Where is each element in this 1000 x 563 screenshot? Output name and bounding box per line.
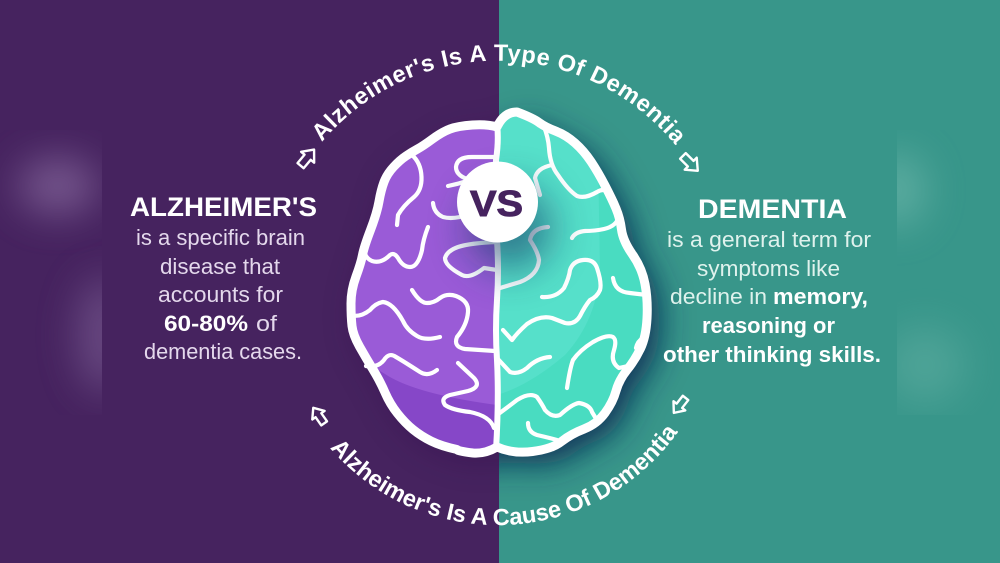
left hemisphere folds [350,155,497,428]
midline [496,124,498,450]
icon: arrow bottom right [668,393,691,417]
text block: Dementia [663,194,881,367]
brain illustration [346,108,652,458]
heading: Alzheimer's: ALZHEIMER'S [130,192,317,222]
description: Dementia [663,227,881,367]
description: Alzheimer's: of [256,311,278,336]
heading: Dementia: DEMENTIA [698,194,847,224]
curved label: bottom: Alzheimer's Is A Cause Of Dementia [330,427,678,526]
text block: Alzheimer's [130,192,317,364]
description: Dementia: decline in [670,284,767,309]
blurred patch right [897,148,964,404]
icon: arrow bottom left [307,404,330,428]
VS badge: VS [470,183,523,224]
description: Alzheimer's: accounts for [158,282,283,307]
curved label: top: Alzheimer's Is A Type Of Dementia [314,44,682,146]
description: Dementia: reasoning or [702,313,835,338]
icon: arrow top left [294,144,321,171]
blurred patch left [18,158,130,393]
panel: teal background [499,0,1000,563]
description: Alzheimer's: disease that [160,254,280,279]
description: Alzheimer's [136,225,305,364]
description: Dementia: other thinking skills. [663,342,881,367]
brain outline [351,112,647,453]
description: Dementia: is a general term for [667,227,871,252]
VS badge [457,162,538,242]
left hemisphere fill [356,129,495,450]
description: Alzheimer's: is a specific brain [136,225,305,250]
description: Alzheimer's: 60-80% [164,311,248,336]
right hemisphere folds [497,122,647,449]
panel: purple background [0,0,499,563]
icon: arrow top right [677,150,704,177]
description: Dementia: memory, [773,284,868,309]
description: Alzheimer's: dementia cases. [144,339,302,364]
shadow cast by VS circle [468,186,552,270]
brain shadow [499,104,682,487]
right hemisphere fill [499,116,643,448]
description: Dementia: symptoms like [697,256,840,281]
